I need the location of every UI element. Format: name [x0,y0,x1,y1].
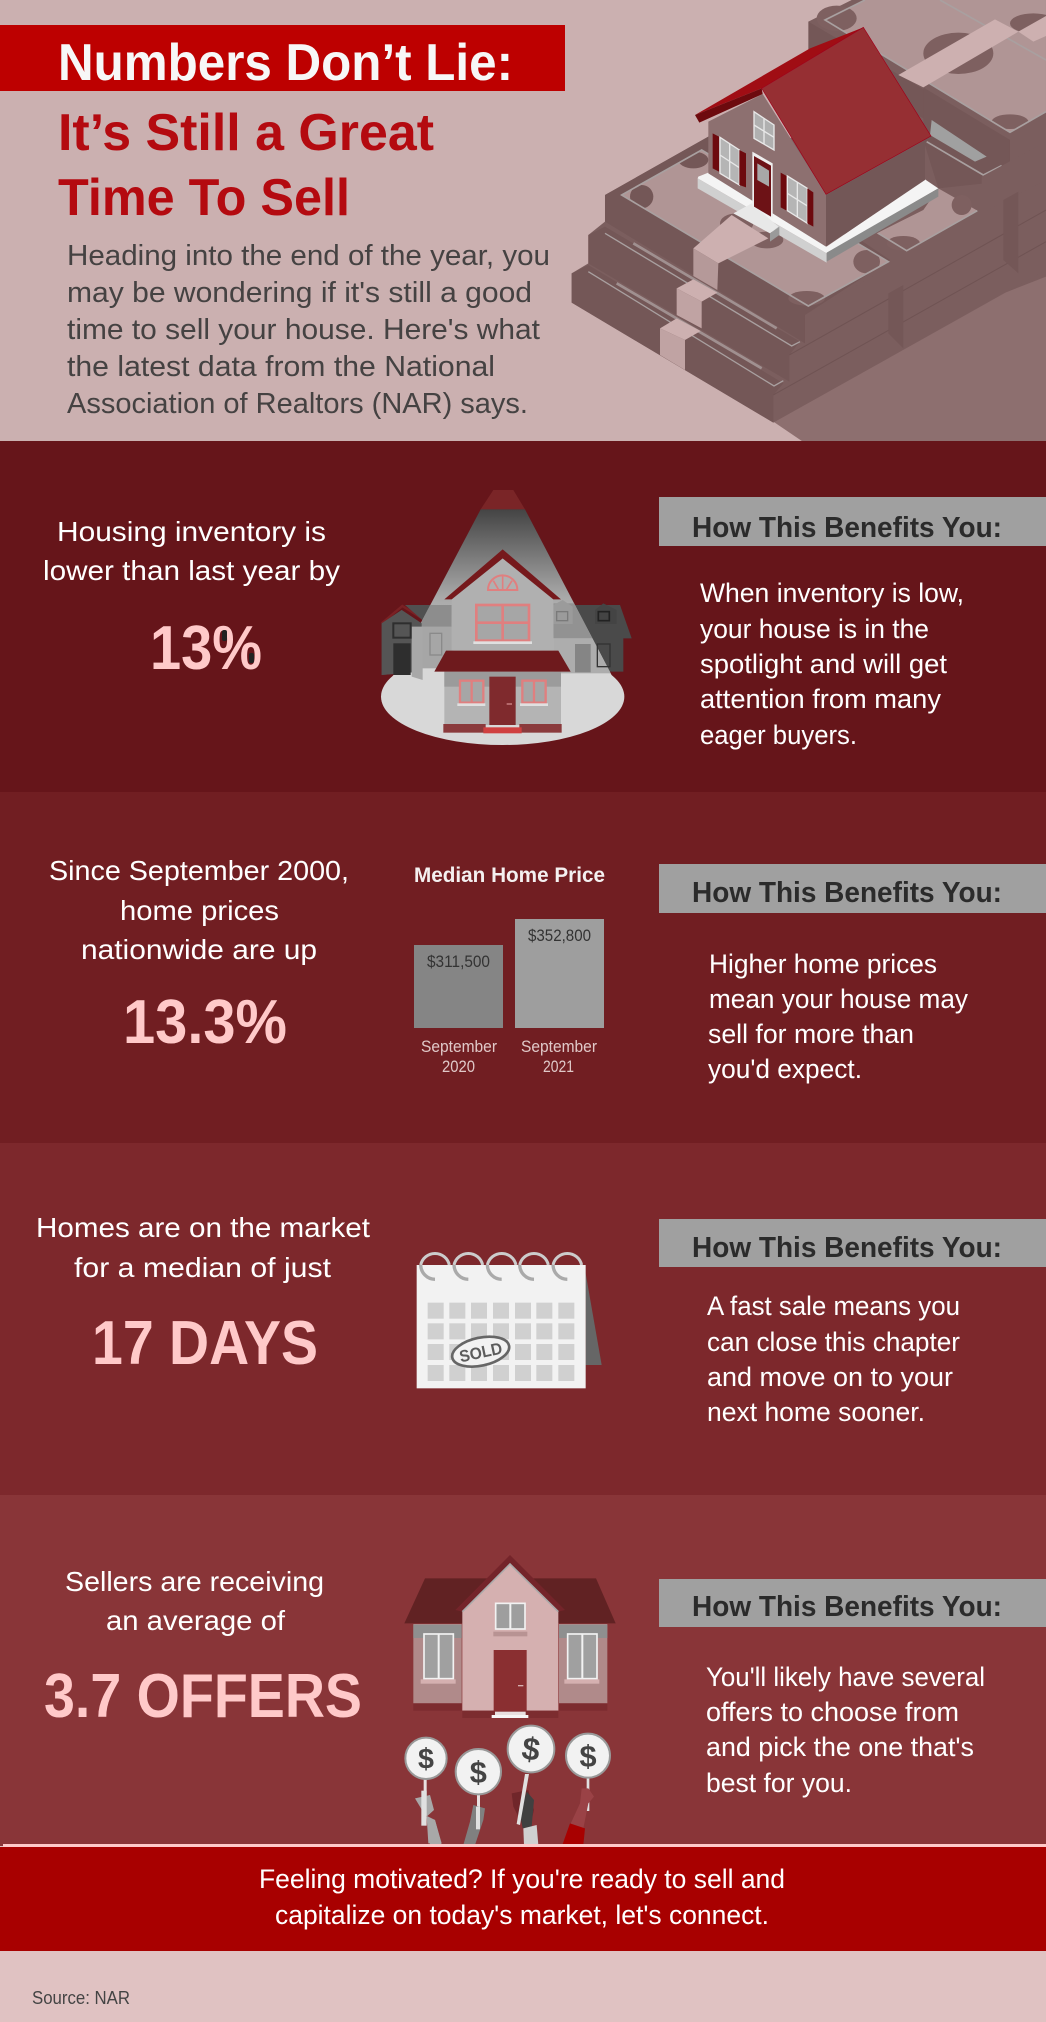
icon: calendar with sold stamp [417,1253,602,1388]
heading: It's Still a Great Time To Sell: It’s Still a Great [58,104,434,162]
callout: how this benefits you, speed: next home sooner. [707,1397,925,1427]
paddle: second [456,1749,501,1845]
stat: 13.3%: 13.3% [123,988,287,1057]
paddle: first: $ [418,1743,434,1775]
title banner: Numbers Don’t Lie: [58,34,513,92]
bar chart: median home price [414,864,605,1076]
intro paragraph: Association of Realtors (NAR) says. [67,388,528,420]
stat: 17 days: 17 DAYS [92,1309,318,1378]
intro paragraph: may be wondering if it's still a good [67,277,532,309]
callout: how this benefits you, offers: and pick the one that's [706,1732,974,1762]
statement: days on market: for a median of just [74,1252,331,1283]
statement: offers: an average of [106,1605,285,1636]
callout: how this benefits you, inventory: spotlight and will get [700,649,948,679]
callout: how this benefits you, prices: mean your house may [709,984,969,1014]
panel: days on market [0,1143,1046,1495]
call to action banner [0,1844,1046,1951]
stat: 13%: 13% [150,614,262,683]
statement: offers [65,1566,324,1636]
callout: how this benefits you, speed [659,1219,1046,1427]
illustration: house on stacks of money [572,0,1046,442]
bar chart: median home price: September [521,1037,597,1056]
callout: how this benefits you, prices: Higher home prices [709,949,937,979]
callout: how this benefits you, speed: can close this chapter [707,1327,960,1357]
callout: how this benefits you, offers: offers to choose from [706,1697,959,1727]
heading: It's Still a Great Time To Sell: Time To Sell [58,169,350,227]
stat: 3.7 offers: 3.7 OFFERS [44,1662,362,1731]
statement: housing inventory: lower than last year by [43,555,340,586]
call to action banner: capitalize on today's market, let's connect. [275,1900,769,1930]
callout: how this benefits you, inventory [659,497,1046,750]
footer with source: Source: NAR [32,1988,130,2008]
callout: how this benefits you, speed: and move on to your [707,1362,953,1392]
statement: days on market [36,1212,370,1283]
callout: how this benefits you, offers: You'll likely have several [706,1662,985,1692]
paddle: fourth: $ [579,1740,597,1774]
callout: how this benefits you, offers [659,1579,1046,1798]
panel: hero header [0,0,1046,442]
callout: how this benefits you, offers: best for you. [706,1768,852,1798]
statement: offers: Sellers are receiving [65,1566,324,1597]
icon: calendar with sold stamp: SOLD [458,1339,504,1366]
callout: how this benefits you, prices [659,864,1046,1084]
intro paragraph: Heading into the end of the year, you [67,240,550,272]
paddle: first [405,1738,447,1845]
bar chart: median home price: $352,800 [528,926,591,945]
intro paragraph [67,240,550,420]
intro paragraph: the latest data from the National [67,351,495,383]
callout: how this benefits you, speed: How This Benefits You: [692,1232,1002,1264]
callout: how this benefits you, speed: A fast sale means you [707,1291,960,1321]
panel: offers [0,1495,1046,1846]
callout: how this benefits you, inventory: your house is in the [700,614,929,644]
paddle: third: $ [520,1730,543,1768]
callout: how this benefits you, prices: How This Benefits You: [692,877,1002,909]
statement: home prices: Since September 2000, [49,855,349,886]
footer with source [0,1951,1046,2022]
panel: home prices [0,792,1046,1143]
bar chart: median home price: Median Home Price [414,864,605,887]
callout: how this benefits you, inventory: When inventory is low, [700,578,964,608]
paddle: third [508,1726,554,1845]
callout: how this benefits you, prices: you'd expect. [708,1054,862,1084]
statement: home prices: nationwide are up [81,934,317,965]
statement: housing inventory: Housing inventory is [57,516,326,547]
panel: housing inventory [0,441,1046,792]
call to action banner: Feeling motivated? If you're ready to sell and [259,1864,785,1894]
statement: home prices: home prices [120,895,279,926]
callout: how this benefits you, prices: sell for more than [708,1019,914,1049]
bar chart: median home price: $311,500 [427,952,490,971]
bar chart: median home price: 2021 [543,1057,574,1076]
paddle: fourth [562,1734,610,1845]
heading: It's Still a Great Time To Sell [58,104,434,227]
callout: how this benefits you, inventory: How This Benefits You: [692,512,1002,544]
statement: days on market: Homes are on the market [36,1212,370,1243]
callout: how this benefits you, inventory: eager buyers. [700,720,857,750]
paddle: second: $ [470,1756,487,1790]
bar chart: median home price: September [421,1037,497,1056]
callout: how this benefits you, offers: How This Benefits You: [692,1591,1002,1623]
callout: how this benefits you, inventory: attention from many [700,684,942,714]
icon: house in spotlight [381,490,632,745]
intro paragraph: time to sell your house. Here's what [67,314,540,346]
statement: housing inventory [43,516,340,586]
icon: house and bidding paddles [404,1555,616,1845]
bar chart: median home price: 2020 [442,1057,475,1076]
statement: home prices [49,855,349,965]
